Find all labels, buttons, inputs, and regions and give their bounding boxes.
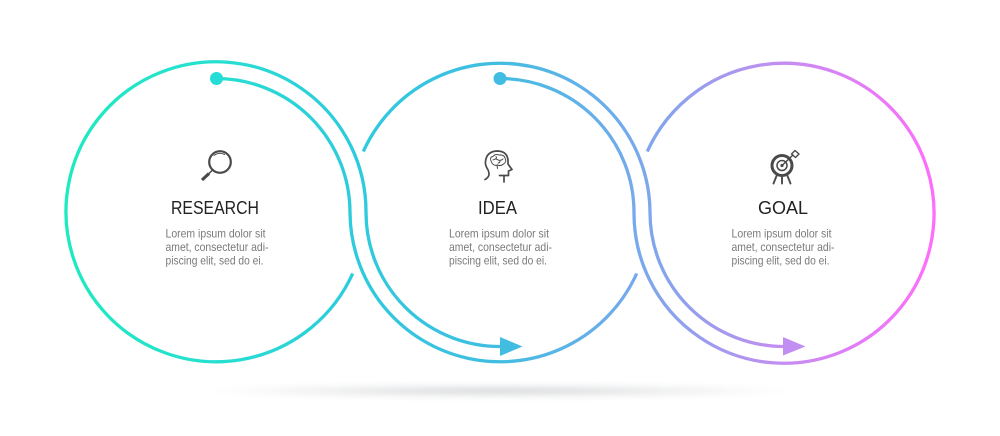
text: idea body: piscing elit, sed do ei. [449, 254, 547, 268]
text: goal body: amet, consectetur adi- [732, 240, 835, 254]
ribbon: idea inner line flowing to goal outer ring [500, 63, 934, 363]
icon: head with brain [485, 151, 512, 182]
heading: research: RESEARCH [171, 197, 259, 218]
text: research body: piscing elit, sed do ei. [166, 254, 264, 268]
heading: idea: IDEA [478, 197, 518, 218]
ground shadow [200, 385, 800, 397]
start dot: idea [494, 72, 506, 85]
ribbon: research outer ring flowing to idea arrow [66, 62, 502, 362]
arrowhead: goal [783, 337, 806, 356]
icon: target with arrow [772, 150, 799, 184]
text: goal body: piscing elit, sed do ei. [732, 254, 830, 268]
arrowhead: idea [500, 337, 522, 356]
heading: goal: GOAL [758, 197, 808, 218]
text: idea body: amet, consectetur adi- [449, 240, 552, 254]
text: goal body: Lorem ipsum dolor sit [732, 226, 832, 240]
text: idea body: Lorem ipsum dolor sit [449, 226, 550, 240]
ribbon: research inner line flowing to idea outer ring [216, 78, 637, 362]
icon: magnifying glass [202, 151, 231, 180]
text: research body: Lorem ipsum dolor sit [166, 226, 266, 240]
start dot: research [210, 72, 223, 85]
text: research body: amet, consectetur adi- [166, 240, 269, 254]
ribbon: idea outer ring flowing to goal arrow [363, 63, 786, 347]
